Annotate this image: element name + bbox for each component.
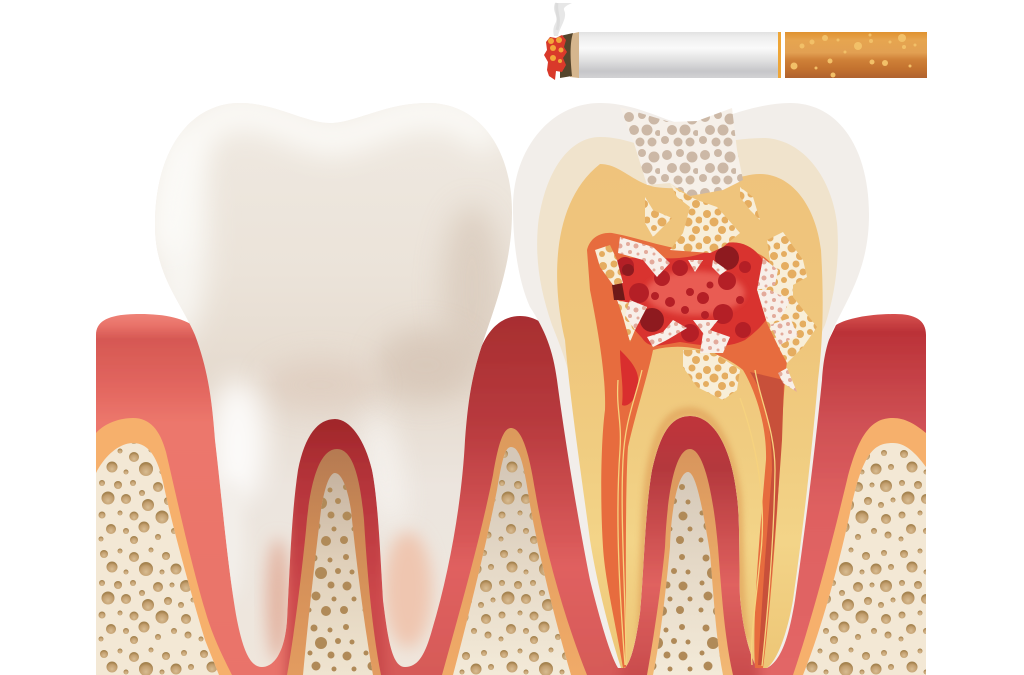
tooth shading: [152, 112, 502, 662]
white paper: [578, 32, 778, 78]
filter band: [778, 32, 781, 78]
smoke: [553, 3, 572, 36]
lighter infection centre: [645, 271, 745, 315]
dentin shadow around root arch: [642, 412, 744, 640]
enamel and cementum: [513, 103, 869, 668]
jaw bone: right section: [793, 418, 926, 675]
filter: [785, 32, 927, 78]
nerve lines: [618, 370, 775, 666]
pulp infection: [612, 242, 773, 346]
healthy tooth: [152, 103, 512, 667]
dark red lesions: [616, 257, 751, 342]
decay: white shards: [618, 237, 798, 392]
cigarette: [544, 3, 927, 80]
jaw bone: under damaged tooth: [647, 449, 733, 675]
decay: porous dentin: [595, 183, 817, 400]
damaged tooth: [513, 103, 869, 668]
tan charred paper: [570, 32, 579, 78]
left root canal: [620, 350, 638, 406]
maroon lesions: [622, 246, 739, 332]
right root canal shading: [750, 372, 784, 665]
burning ember: [544, 35, 567, 80]
gum tissue: [60, 314, 966, 675]
jaw bone: left section: [96, 418, 232, 675]
pale outer dentin: [537, 137, 838, 369]
maroon pit: [612, 283, 625, 300]
ash end: [560, 33, 573, 78]
inner dentin: [557, 164, 823, 668]
jaw bone: between teeth: [442, 428, 587, 675]
pulp chamber: [587, 233, 787, 668]
decay: crown cavity: [620, 107, 743, 196]
filter speckles: [790, 34, 916, 78]
jaw bone: under healthy tooth: [287, 449, 381, 675]
